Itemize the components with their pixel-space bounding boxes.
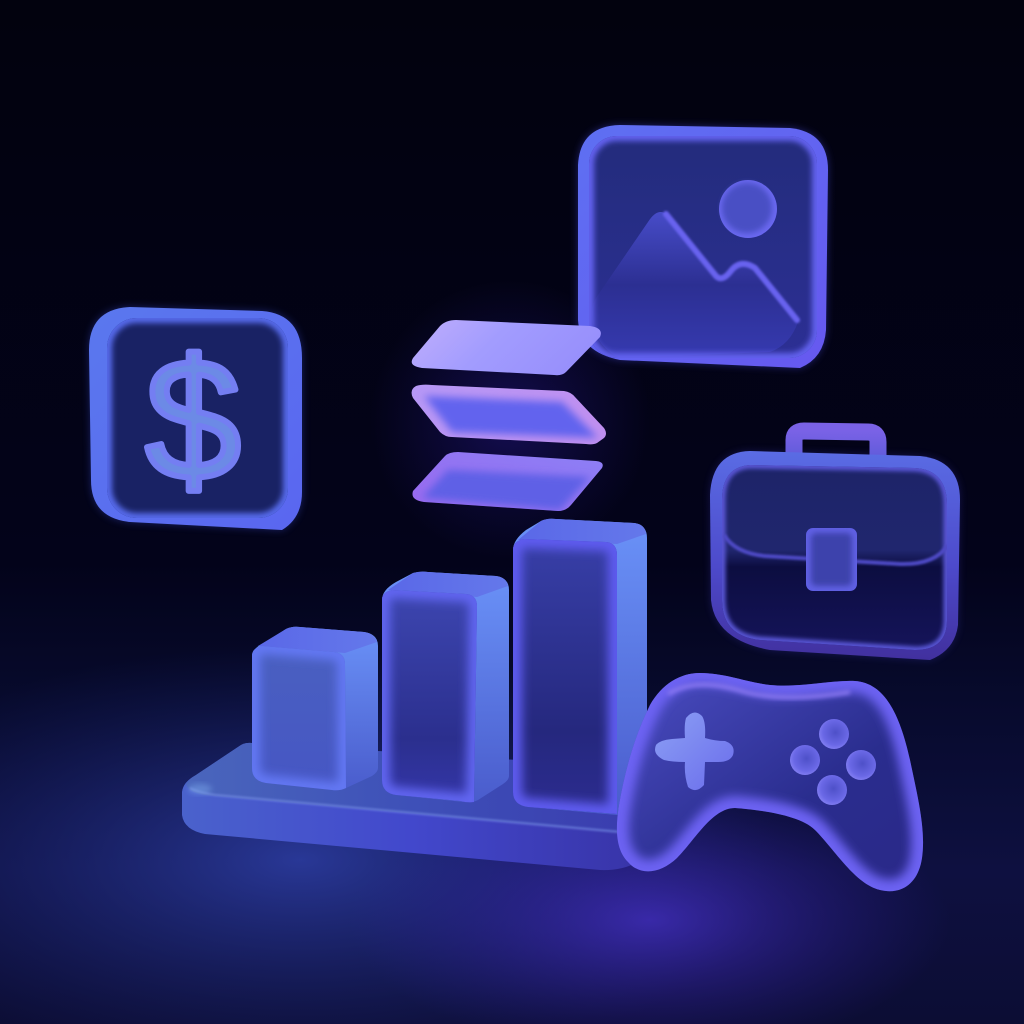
controller buttons (790, 719, 876, 805)
icon: image frame (578, 125, 828, 368)
icon: sun (719, 180, 777, 238)
chart: glass bars on base (182, 519, 647, 870)
briefcase handle (794, 431, 878, 464)
icon: dollar sign: $ (145, 324, 241, 516)
icon: briefcase (710, 431, 960, 660)
icon: dollar card (89, 307, 302, 530)
icon: stacked layers (412, 320, 606, 511)
briefcase flap (724, 535, 948, 564)
bar 3 (513, 519, 647, 815)
icon: game controller (617, 673, 923, 891)
layer: top (412, 320, 601, 375)
briefcase clasp (806, 528, 857, 591)
bar 1 (252, 627, 378, 790)
mountain ridge highlight (666, 214, 797, 320)
briefcase body (710, 451, 960, 660)
bar 2 (382, 572, 509, 802)
layer: middle (412, 385, 606, 444)
d-pad (655, 712, 734, 790)
layer: bottom (412, 452, 603, 511)
chart base (182, 743, 640, 870)
icon: mountains (592, 212, 798, 358)
